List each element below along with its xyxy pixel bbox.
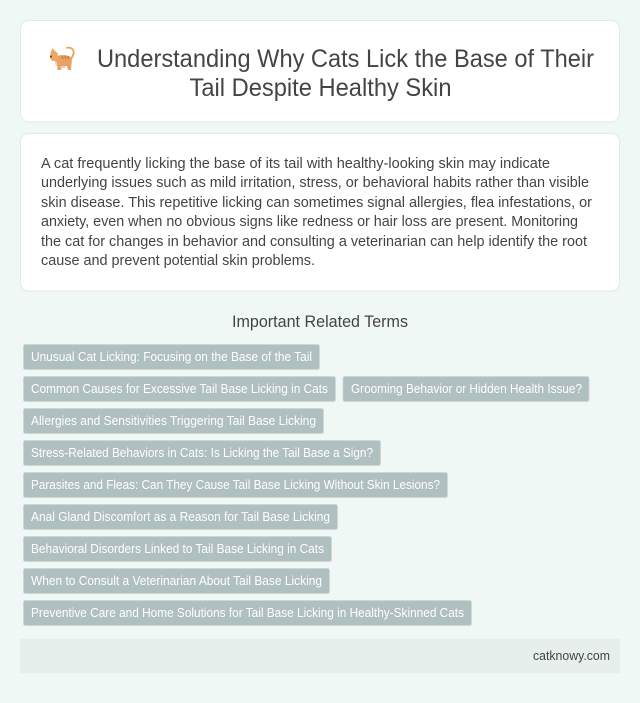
tag [24,600,472,626]
text block: description: anxiety, even when no obvious signs like redness or hair loss are present. Monitoring [41,213,578,230]
tag: Unusual Cat Licking: Focusing on the Base of the Tail [31,350,312,364]
text block: description: the cat for changes in behavior and consulting a veterinarian can help identify the root [41,233,588,250]
tag: Stress-Related Behaviors in Cats: Is Licking the Tail Base a Sign? [31,446,373,460]
tag [24,344,320,370]
icon: cat [50,48,74,70]
text block: description [41,155,592,269]
tag: When to Consult a Veterinarian About Tail Base Licking [31,574,322,588]
tag: Grooming Behavior or Hidden Health Issue? [351,382,582,396]
title: Understanding Why Cats Lick the Base of Their [97,45,594,73]
tag [24,472,448,498]
title [97,45,594,102]
text block: description: cause and prevent potential skin problems. [41,252,315,269]
tag [24,440,380,466]
tag: Common Causes for Excessive Tail Base Licking in Cats [31,382,328,396]
tag: Allergies and Sensitivities Triggering Tail Base Licking [31,414,316,428]
text block: description: A cat frequently licking the base of its tail with healthy-looking skin may indicate [41,155,550,172]
tag [24,536,332,562]
text block: description: underlying issues such as mild irritation, stress, or behavioral habits rather than visible [41,174,589,191]
tag: Anal Gland Discomfort as a Reason for Tail Base Licking [31,510,330,524]
tag: Parasites and Fleas: Can They Cause Tail Base Licking Without Skin Lesions? [31,478,440,492]
footer [20,639,620,673]
title: Tail Despite Healthy Skin [190,74,452,102]
tag [24,376,336,402]
tag [24,504,338,530]
heading: related terms: Important Related Terms [232,313,408,331]
tag [343,376,589,402]
panel: title card [20,20,620,122]
footer: catknowy.com [533,649,610,663]
tag: Preventive Care and Home Solutions for Tail Base Licking in Healthy-Skinned Cats [31,606,464,620]
tag [24,408,324,434]
text block: description: skin disease. This repetitive licking can sometimes signal allergies, flea infestations, or [41,194,592,211]
tag: Behavioral Disorders Linked to Tail Base Licking in Cats [31,542,324,556]
panel: description [20,134,620,291]
panel: related term tags [24,344,589,626]
tag [24,568,330,594]
